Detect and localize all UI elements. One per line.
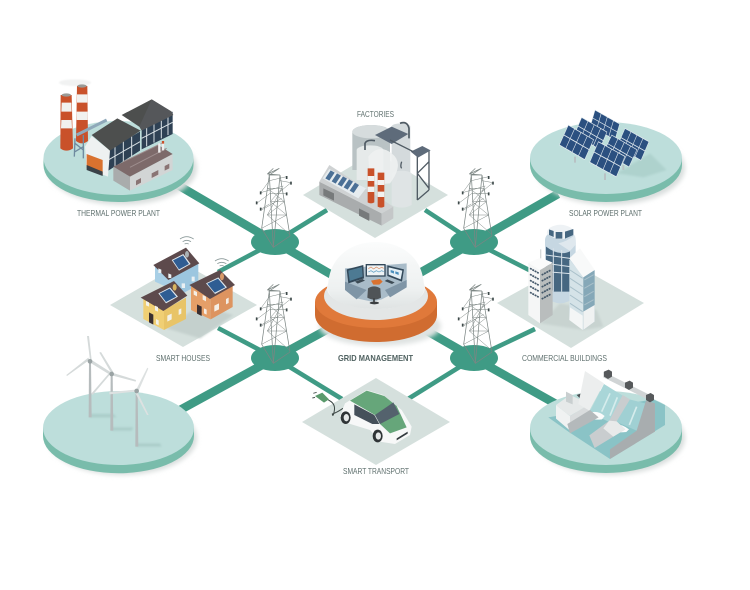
panel: commercial buildings [497,225,644,363]
factory hall with solar roof [319,165,393,226]
panel: hydro power plant [530,370,685,475]
round tower [545,225,576,303]
monitor: right [387,265,404,282]
label: grid management: GRID MANAGEMENT [338,353,414,363]
car body [340,390,412,444]
chimney: right [76,84,88,143]
main hall: back [122,99,173,149]
channel wall: left [567,410,599,433]
car roof and hood [350,391,407,433]
operator and chair [367,279,383,304]
main hall: front [85,118,141,177]
factory chimneys [368,168,384,208]
storage tanks [352,123,412,208]
gantry [74,120,107,158]
panel: smart transport [302,378,450,476]
side windows [354,404,379,424]
monitor: centre [366,264,386,277]
solar array: right [617,128,649,161]
keyboards [355,279,395,284]
windscreen [375,402,399,424]
slab tower [569,248,595,330]
dam wall: left [578,371,604,411]
power house [556,392,592,431]
bridge [603,372,650,401]
panel shadows [617,153,667,177]
turbine shadows [90,414,162,447]
power lines network [176,184,558,410]
pylon: lower right [459,284,493,363]
solar array: right middle [603,135,637,167]
label: commercial buildings: COMMERCIAL BUILDINGS [522,353,607,363]
pylon: upper left [257,168,291,247]
solar array: middle [574,117,607,150]
channel wall: middle [589,395,630,448]
furnace door [87,154,103,176]
panel: smart houses [110,237,257,363]
wind turbine: right [109,368,149,447]
foam [587,412,629,432]
wifi: blue house [180,237,194,244]
car details [397,432,408,440]
control room walls [345,263,407,302]
label: factories: FACTORIES [357,109,394,119]
panel: solar power plant [530,110,685,218]
river water [548,399,665,459]
yellow house [141,281,187,330]
electric plug and cable [312,392,343,415]
label: smart transport: SMART TRANSPORT [343,466,409,476]
hub: upper right [450,229,498,255]
hub: lower right [450,345,498,371]
blue house [153,248,199,297]
label: solar power plant: SOLAR POWER PLANT [569,208,642,218]
label: thermal power plant: THERMAL POWER PLANT [77,208,160,218]
panel: wind farm [43,336,197,475]
panel: factories [303,109,448,238]
hub: upper left [251,229,299,255]
solar array: back [590,110,620,140]
panel: thermal power plant [44,79,197,218]
white plinth [324,267,428,320]
spillway: right [616,399,647,431]
label: smart houses: SMART HOUSES [156,353,210,363]
glass dome [328,242,424,309]
wifi: orange house [215,259,229,266]
white tower [528,249,553,323]
spillway streaks [602,393,637,425]
wheel: front [373,430,383,442]
wheel: rear [341,411,351,424]
desks [345,280,407,299]
gate houses [604,370,654,402]
solar array: front left [559,125,594,160]
solar array supports [575,157,623,180]
panel: grid management [315,242,441,363]
pylon: lower left [257,284,291,363]
low building [113,141,173,191]
orange base [315,276,437,342]
pylon: upper right [459,168,493,247]
chimney: left [60,93,73,151]
pipes and platform [365,123,431,200]
hub: lower left [251,345,299,371]
pier: right [610,401,655,459]
orange house [189,270,235,319]
wind turbine: middle [91,352,136,431]
wind turbine: left [66,336,111,417]
solar array: front right [589,141,625,177]
spillway: left [589,384,623,423]
monitor: left [347,265,364,283]
